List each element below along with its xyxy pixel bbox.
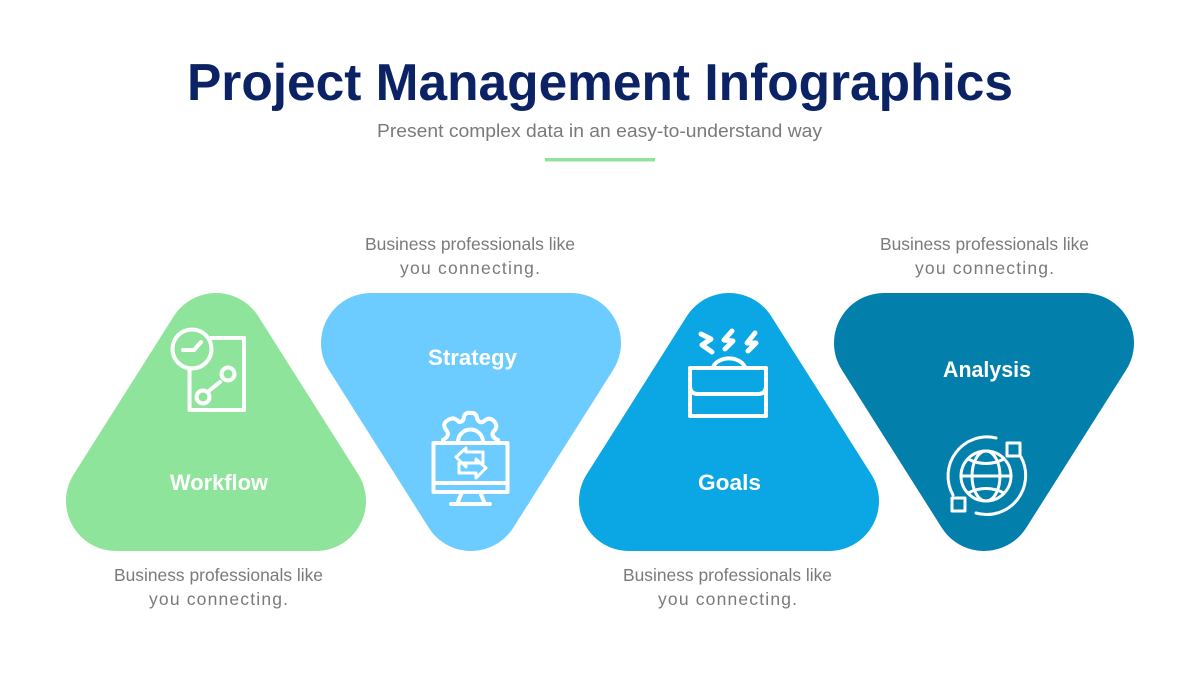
icon: globe with orbit: [948, 437, 1026, 514]
panel: goals: [629, 331, 829, 501]
text: workflow description: Business professionals like: [114, 565, 323, 585]
text: analysis description: Business professionals like: [880, 234, 1089, 254]
text: strategy description: you connecting.: [400, 258, 540, 278]
blue triangle: [629, 343, 829, 501]
text: strategy description: Business professionals like: [365, 234, 575, 254]
teal inverted triangle: [884, 343, 1084, 501]
panel: workflow: [116, 330, 316, 501]
text: analysis description: [880, 234, 1089, 278]
icon: clock and chart sheet: [172, 330, 244, 410]
accent bar: [545, 158, 655, 162]
text: goals description: you connecting.: [658, 589, 797, 609]
panel: analysis: [884, 343, 1084, 514]
text: goals description: [623, 565, 832, 609]
subtitle: Present complex data in an easy-to-understand way: [377, 120, 823, 141]
title: Project Management Infographics: [187, 54, 1013, 112]
text: workflow description: [114, 565, 323, 609]
icon: monitor with gear and arrows: [434, 413, 508, 504]
icon: briefcase with bolts: [690, 331, 766, 416]
text: analysis description: you connecting.: [915, 258, 1054, 278]
label: strategy: Strategy: [428, 345, 518, 370]
text: goals description: Business professionals like: [623, 565, 832, 585]
text: workflow description: you connecting.: [149, 589, 288, 609]
label: analysis: Analysis: [943, 357, 1031, 382]
label: goals: Goals: [698, 470, 761, 495]
green triangle: [116, 343, 316, 501]
label: workflow: Workflow: [170, 470, 269, 495]
text: strategy description: [365, 234, 575, 278]
light blue inverted triangle: [371, 343, 571, 501]
panel: strategy: [371, 343, 571, 504]
